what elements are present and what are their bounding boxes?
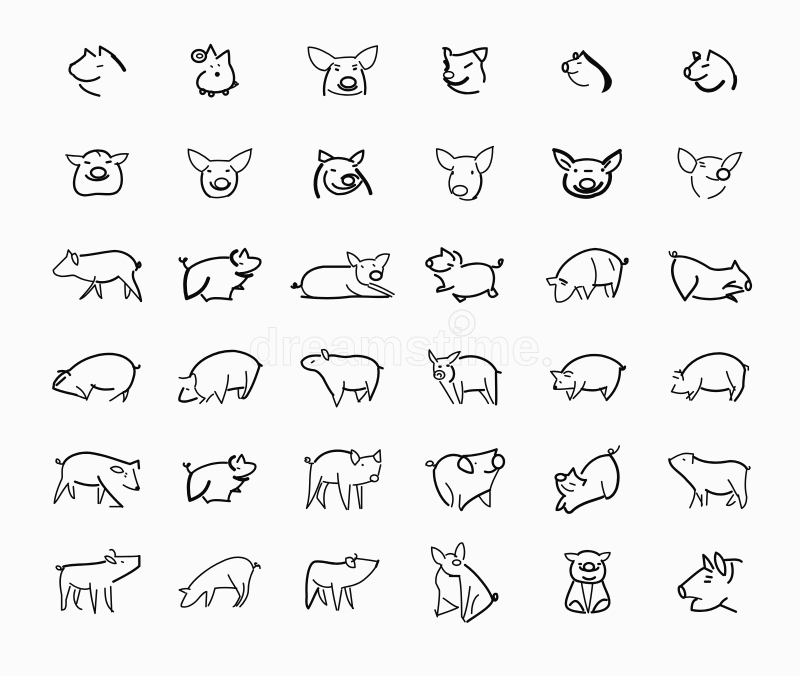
icon: fat pig with head down left — [53, 354, 139, 402]
icon: leaping pig small — [184, 455, 256, 503]
icon: pig snout raised — [302, 350, 383, 407]
icon: pig face narrow — [437, 147, 493, 200]
icon: round piglet — [192, 45, 238, 96]
icon: pig face wide — [66, 151, 128, 195]
icon: lean pig grazing — [179, 557, 260, 607]
icon: pig face three-quarter — [678, 148, 742, 198]
icon: standing pig tall legs — [305, 450, 381, 509]
icon: leaping pig — [180, 249, 260, 301]
icon: pig head profile with neck — [563, 50, 612, 93]
icon: pig face large ears — [308, 46, 377, 95]
icon: pig head down — [547, 249, 627, 302]
watermark: dreamstime — [248, 319, 540, 377]
icon: sitting pig side — [432, 543, 497, 622]
icon: pig head profile 1 — [70, 47, 124, 96]
icon: trotting pig right — [54, 453, 139, 507]
icon: fat pig small — [551, 355, 625, 400]
icon: smiling pig three-quarter — [315, 151, 371, 197]
icon: pig facing viewer — [429, 350, 501, 404]
icon: fat pig small right — [672, 353, 748, 401]
icon: fat pig grazing — [179, 351, 262, 403]
icon: sitting pig front — [565, 551, 610, 613]
icon: boar head with moustache — [443, 48, 487, 93]
icon: pig head side open mouth — [677, 553, 742, 612]
icon: lying pig — [292, 252, 394, 298]
icon: pig profile looking up left — [669, 453, 750, 508]
icon: pig turned head snout up — [426, 449, 504, 510]
icon: piglet looking up — [56, 550, 139, 613]
icon: stretching pig — [556, 446, 619, 513]
icon: bowing pig — [669, 252, 751, 302]
icon: pig face big ears thin — [188, 149, 252, 198]
icon: jumping plump pig — [426, 248, 503, 302]
icon: piglet looking up right — [306, 554, 378, 610]
icon: pig head profile smiling — [685, 51, 735, 91]
icon: bold pig face — [554, 150, 621, 197]
icon: walking pig — [53, 250, 141, 301]
